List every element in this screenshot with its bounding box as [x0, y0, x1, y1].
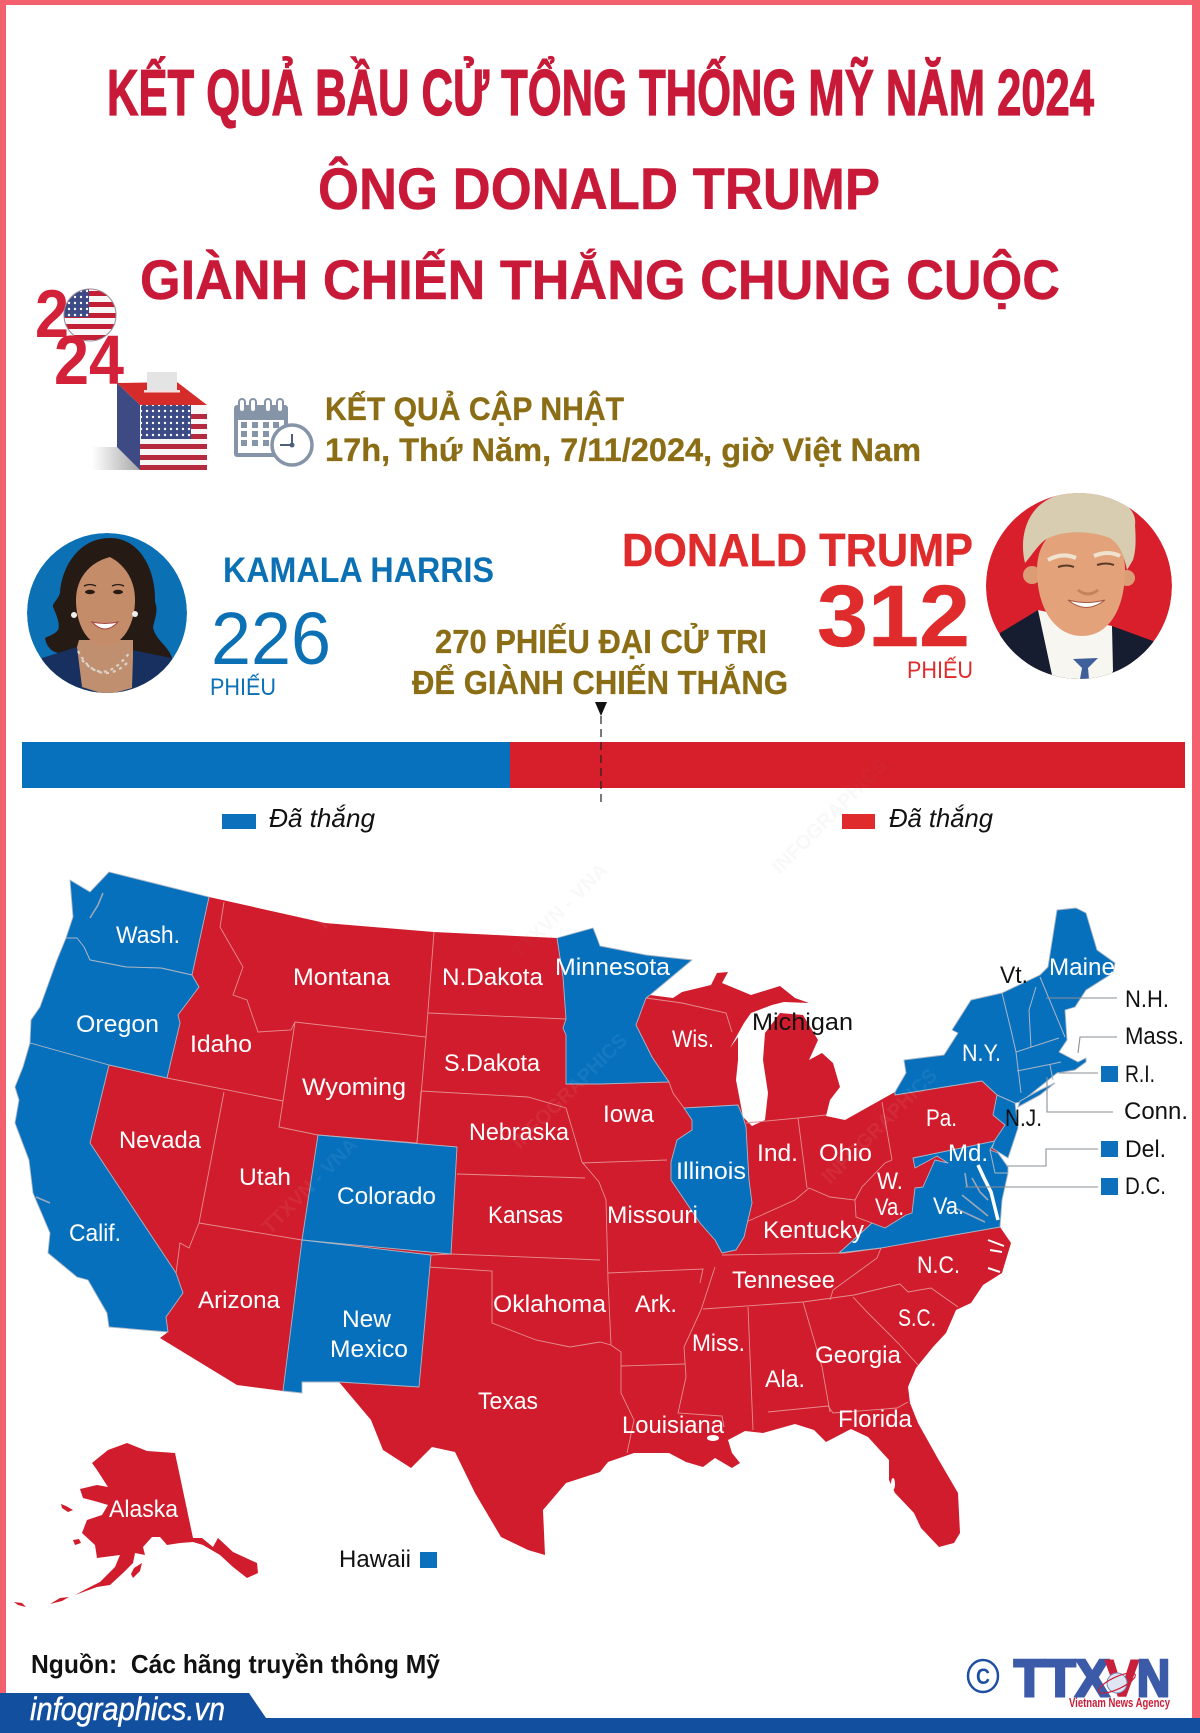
logo: TTXVN: V [1105, 1650, 1139, 1708]
map: state labels on red and blue: Md. [948, 1140, 988, 1167]
map: Alaska [14, 1443, 258, 1607]
map: state labels on red and blue: N.Y. [962, 1040, 1001, 1067]
map: state labels on red and blue: N.Dakota [442, 964, 543, 991]
map: state labels on red and blue: Ohio [819, 1140, 872, 1167]
map: state labels on red and blue: New [342, 1306, 391, 1333]
map: blue state Illinois [671, 1105, 752, 1253]
map: state labels on red and blue: Illinois [676, 1158, 746, 1185]
title [107, 56, 1094, 311]
map: state labels on red and blue: Georgia [815, 1342, 901, 1369]
logo: TTXVN: N [1137, 1650, 1170, 1708]
map: state labels on red and blue: Wis. [672, 1026, 714, 1053]
watermarks: TTXVN - VNA [258, 1134, 362, 1239]
map: state labels on red and blue: Iowa [603, 1101, 654, 1128]
map: Hawaii key: Hawaii [339, 1546, 411, 1573]
electoral vote bar [22, 702, 1185, 806]
map: blue state Oregon [30, 938, 199, 1078]
footer bar [0, 1691, 1200, 1733]
icon: 2024 flag ball and ballot box: 2 [35, 276, 69, 352]
map: state labels on red and blue: W. [877, 1168, 903, 1195]
map: state labels on red and blue: Miss. [692, 1330, 745, 1357]
candidate: Kamala Harris votes: KAMALA HARRIS [223, 551, 494, 590]
watermarks: INFOGRAPHICS [508, 1030, 632, 1154]
map: blue state New Mexico [283, 1240, 431, 1393]
portrait: Kamala Harris [27, 533, 187, 700]
map: state labels on red and blue: Va. [933, 1193, 964, 1220]
map: state labels on red and blue: S.Dakota [444, 1050, 540, 1077]
update text: KẾT QUẢ CẬP NHẬT [325, 391, 624, 427]
map: black state labels: D.C. [1125, 1173, 1166, 1200]
candidate: Kamala Harris votes: 226 [211, 597, 331, 680]
update text [325, 391, 921, 468]
map: state labels on red and blue: Montana [293, 964, 390, 991]
map: state labels on red and blue: Oklahoma [493, 1291, 606, 1318]
portrait: Donald Trump [986, 493, 1172, 690]
map: state labels on red and blue: Minnesota [555, 954, 670, 981]
map: state labels on red and blue: Va. [875, 1194, 904, 1221]
map: contiguous states base (red) [15, 872, 1115, 1555]
map: state labels on red and blue: S.C. [898, 1305, 936, 1332]
logo: TTXVN [968, 1650, 1171, 1710]
map: state labels on red and blue: Wash. [116, 922, 180, 949]
map: black state labels [752, 962, 1188, 1200]
watermarks: INFOGRAPHICS [818, 1065, 942, 1189]
icon: 2024 flag ball and ballot box: 24 [54, 321, 124, 399]
watermarks: INFOGRAPHICS [768, 755, 892, 879]
footer bar: infographics.vn [30, 1691, 225, 1727]
candidate: Donald Trump votes: PHIẾU [907, 656, 973, 684]
map: blue state California [15, 1043, 183, 1332]
map: state labels on red and blue: Oregon [76, 1011, 159, 1038]
map: state labels on red and blue: Arizona [198, 1287, 280, 1314]
map: state labels on red and blue: Ind. [757, 1140, 798, 1167]
map: state labels on red and blue: Nebraska [469, 1119, 569, 1146]
map: black state labels: Mass. [1125, 1023, 1184, 1050]
map: state labels on red and blue: N.C. [917, 1252, 960, 1279]
map: Long Island and coast details [36, 893, 1055, 1490]
candidate: Donald Trump votes: 312 [817, 568, 970, 665]
map: black state labels: N.H. [1125, 986, 1169, 1013]
map: black state labels: N.J. [1005, 1105, 1042, 1132]
map: blue state Minnesota [557, 928, 692, 1084]
270 votes threshold text: 270 PHIẾU ĐẠI CỬ TRI [435, 623, 767, 660]
map: state labels on red and blue: Tennesee [732, 1267, 835, 1294]
map: state labels on red and blue: Utah [239, 1164, 291, 1191]
watermarks: TTXVN - VNA [508, 859, 612, 964]
legend: Đã thắng [889, 803, 994, 833]
map: leader lines and small-state keys [965, 998, 1118, 1195]
map: black state labels: R.I. [1125, 1061, 1155, 1088]
map: state labels on red and blue [69, 922, 1115, 1523]
map: blue Maryland, Delaware and Virginia [839, 1141, 1008, 1253]
270 votes threshold text [412, 623, 788, 701]
icon: calendar and clock [234, 399, 312, 465]
map: blue state Washington [66, 872, 209, 975]
watermarks [258, 755, 942, 1239]
map: state labels on red and blue: Nevada [119, 1127, 201, 1154]
map: state labels on red and blue: Louisiana [622, 1412, 724, 1439]
candidate: Donald Trump votes: DONALD TRUMP [622, 524, 973, 576]
map: state labels on red and blue: Kansas [488, 1202, 563, 1229]
source: Nguồn: Các hãng truyền thông Mỹ [31, 1649, 441, 1679]
map: black state labels: Michigan [752, 1009, 853, 1036]
map: state labels on red and blue: Idaho [190, 1031, 252, 1058]
map: black state labels: Vt. [1000, 962, 1028, 989]
watermarks: INFOGRAPHICS [313, 810, 437, 934]
update text: 17h, Thứ Năm, 7/11/2024, giờ Việt Nam [325, 432, 921, 468]
map: northeastern and mid-Atlantic state lines [990, 977, 1065, 1173]
map: red state borders [167, 902, 958, 1453]
candidate: Donald Trump votes [622, 524, 973, 684]
map: blue state Colorado [302, 1135, 457, 1254]
map: state labels on red and blue: Maine [1049, 954, 1115, 981]
map: blue New York, New Jersey and New England [895, 908, 1115, 1158]
map: state labels on red and blue: Florida [838, 1406, 912, 1433]
map: state labels on red and blue: Kentucky [763, 1217, 865, 1244]
candidate: Kamala Harris votes: PHIẾU [210, 673, 276, 701]
US map [14, 755, 1188, 1607]
map: state labels on red and blue: Calif. [69, 1220, 121, 1247]
logo: TTXVN: C [976, 1664, 990, 1689]
title: ÔNG DONALD TRUMP [318, 157, 880, 222]
map: black state labels: Conn. [1124, 1098, 1188, 1125]
title: GIÀNH CHIẾN THẮNG CHUNG CUỘC [140, 248, 1060, 311]
270 votes threshold text: ĐỂ GIÀNH CHIẾN THẮNG [412, 664, 788, 701]
map: state labels on red and blue: Missouri [607, 1202, 698, 1229]
map: state labels on red and blue: Wyoming [302, 1074, 406, 1101]
map: state labels on red and blue: Ark. [635, 1291, 677, 1318]
candidate: Kamala Harris votes [210, 551, 494, 701]
map: state labels on red and blue: Alaska [109, 1496, 178, 1523]
logo: TTXVN: TTX [1014, 1650, 1109, 1708]
map: state labels on red and blue: Mexico [330, 1336, 408, 1363]
icon: 2024 flag ball and ballot box [35, 276, 207, 470]
map: state labels on red and blue: Texas [478, 1388, 538, 1415]
legend: Đã thắng [269, 803, 376, 833]
legend [222, 803, 994, 833]
map: state labels on red and blue: Colorado [337, 1183, 436, 1210]
map: black state labels: Del. [1125, 1136, 1166, 1163]
map: state labels on red and blue: Pa. [926, 1105, 957, 1132]
map: state labels on red and blue: Ala. [765, 1366, 805, 1393]
